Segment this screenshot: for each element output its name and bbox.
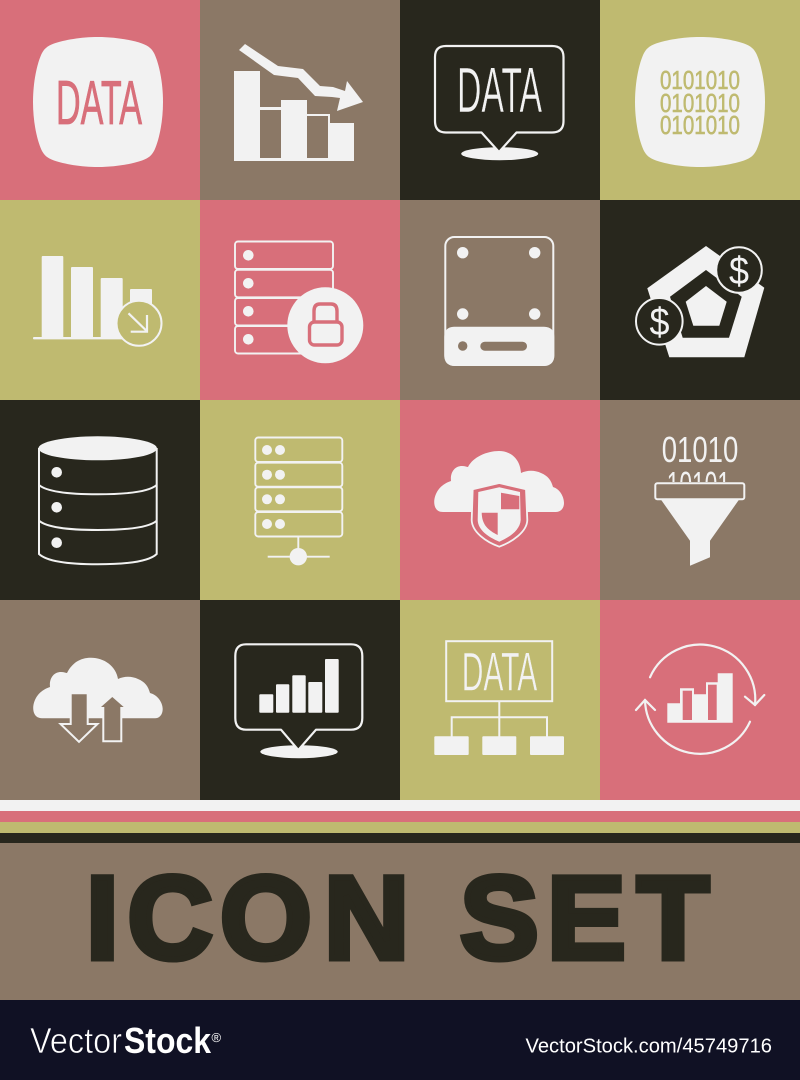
panel: data squircle: DATA	[56, 69, 142, 138]
panel: database cylinder	[0, 400, 200, 600]
panel: binary squircle: 0101010	[660, 65, 740, 95]
panel: chart refresh cycle	[600, 600, 800, 800]
panel: cloud security shield	[400, 400, 600, 600]
panel: binary squircle	[600, 0, 800, 200]
panel: binary squircle: 0101010	[660, 88, 740, 118]
panel: binary squircle: 0101010	[660, 110, 740, 140]
footer watermark bar: VectorStock.com/45749716	[526, 1036, 772, 1058]
panel: hard drive	[400, 200, 600, 400]
panel: descending bars with arrow	[0, 200, 200, 400]
panel: data speech bubble: DATA	[457, 54, 542, 126]
footer watermark bar	[0, 1000, 800, 1080]
panel: pentagon with dollars	[600, 200, 800, 400]
title banner	[0, 843, 800, 1000]
panel: chart speech bubble	[200, 600, 400, 800]
panel: binary funnel	[654, 436, 746, 566]
footer watermark bar: Vector	[30, 1020, 122, 1061]
panel: locked server	[200, 200, 400, 400]
panel: data speech bubble	[400, 0, 600, 200]
panel: declining bar chart	[200, 0, 400, 200]
panel: binary funnel: 01010	[662, 429, 738, 470]
panel: network server	[200, 400, 400, 600]
footer watermark bar: ®	[212, 1030, 222, 1045]
panel: pentagon with dollars: $	[729, 250, 749, 293]
panel: binary funnel: 10101	[667, 464, 730, 505]
panel: data hierarchy: DATA	[462, 641, 537, 703]
panel: data hierarchy	[400, 600, 600, 800]
title banner: ICON SET	[86, 852, 709, 984]
panel: cloud upload download	[0, 600, 200, 800]
footer watermark bar: Stock	[124, 1020, 212, 1061]
panel: data squircle	[0, 0, 200, 200]
panel: pentagon with dollars: $	[650, 301, 670, 344]
decorative colour stripes	[0, 800, 800, 843]
